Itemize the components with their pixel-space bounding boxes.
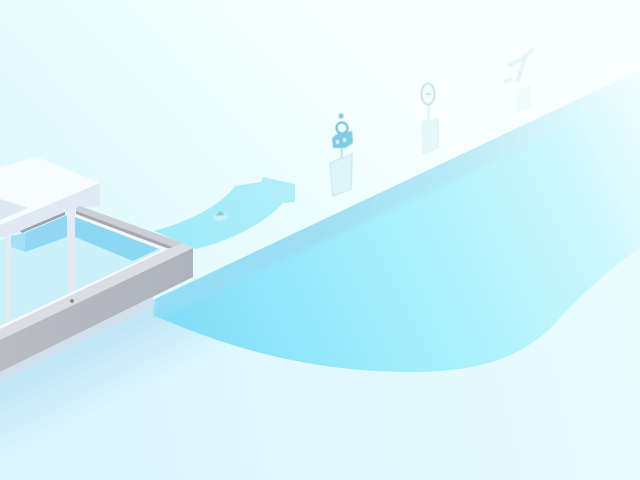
dark shelf edge — [20, 212, 65, 233]
front rail top — [0, 243, 193, 340]
white wash fading upper right — [520, 0, 640, 90]
platform retaining wall — [153, 50, 640, 316]
glass column left — [6, 236, 11, 326]
interior glass floor — [0, 216, 170, 328]
small boat icon — [212, 211, 228, 222]
marker: circular sign in glass planter — [422, 84, 438, 154]
rail lower strip — [0, 297, 153, 382]
left interior wall end — [10, 233, 25, 252]
planter — [516, 85, 531, 112]
curved flow arrow — [154, 177, 295, 249]
marker: faded tree sign — [504, 49, 534, 112]
column bolt — [70, 299, 74, 303]
water pool — [153, 80, 640, 372]
icon: tree arrows — [504, 49, 534, 82]
icon: ring badge — [422, 84, 434, 120]
front rail face — [0, 248, 193, 372]
icon: person badge — [332, 113, 353, 166]
marker: figure sign in glass planter — [330, 113, 353, 196]
glass pane in block — [0, 199, 28, 220]
left interior wall — [25, 215, 67, 252]
glass column right — [68, 208, 75, 292]
white block side — [0, 183, 100, 238]
back rail — [76, 206, 183, 247]
glass building frame — [0, 157, 193, 382]
floor shadow under frame — [0, 306, 240, 480]
planter — [422, 119, 438, 154]
white block top — [0, 157, 100, 225]
planter — [330, 154, 352, 196]
interior back wall — [75, 216, 160, 261]
